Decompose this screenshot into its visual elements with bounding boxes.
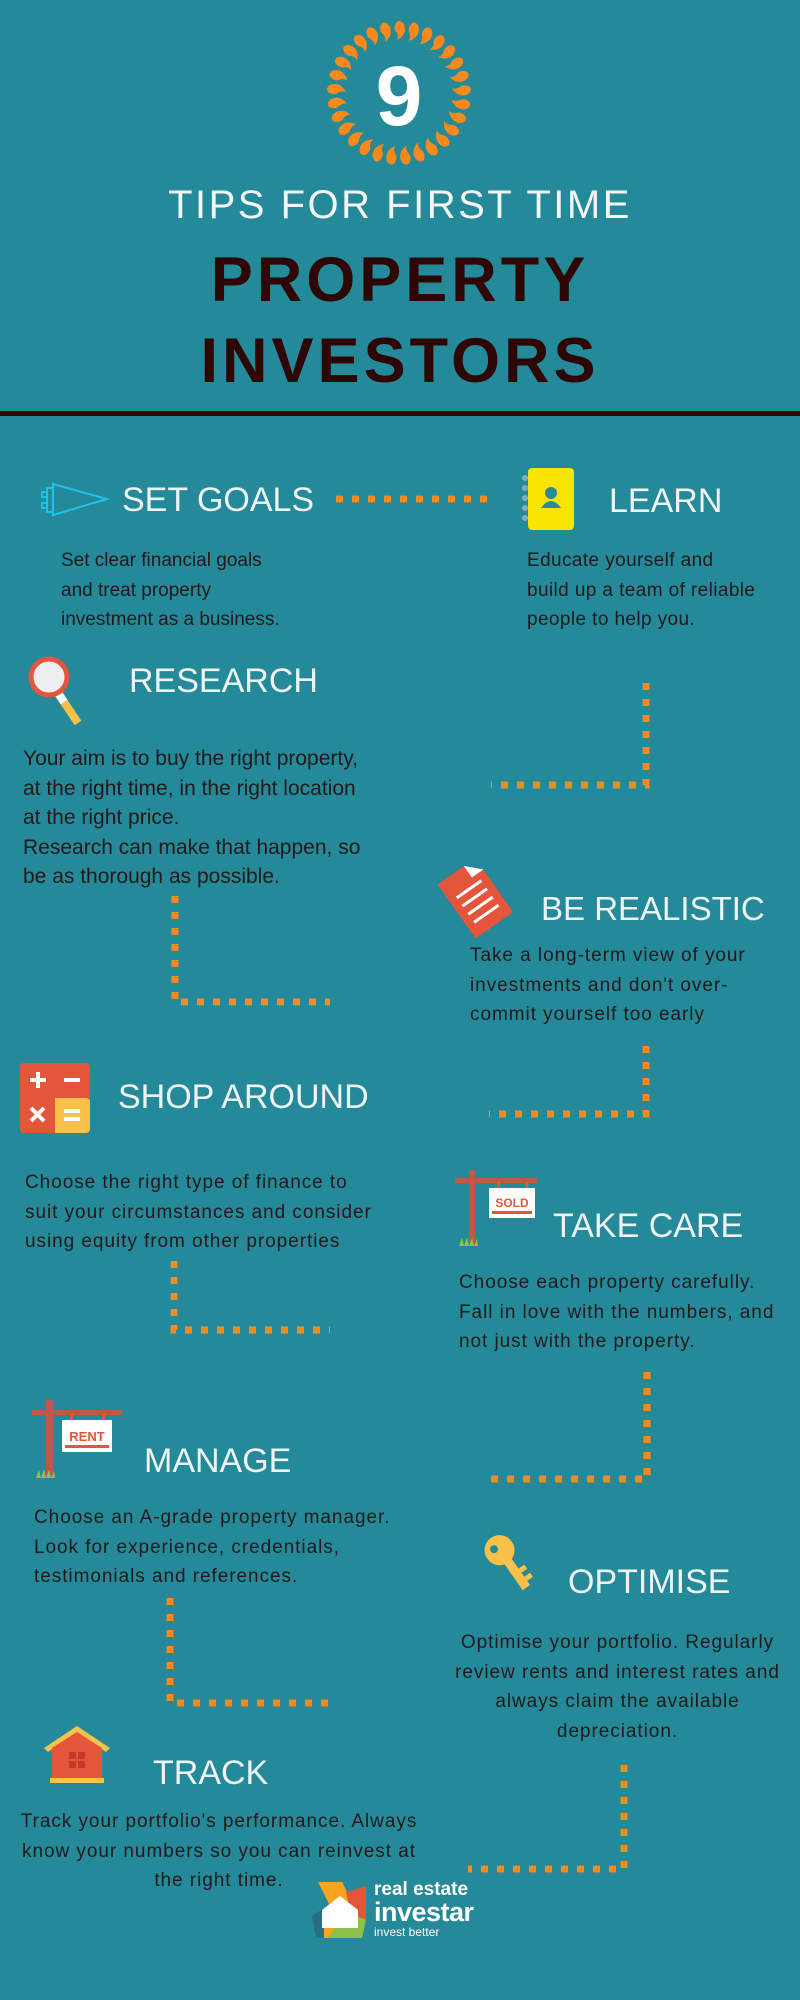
text: Choose the right type of finance to xyxy=(25,1172,348,1193)
text: Optimise your portfolio. Regularly xyxy=(461,1632,774,1653)
header badge: 9 in drop ring xyxy=(327,21,471,165)
icon: house xyxy=(44,1726,110,1783)
logo text: investar xyxy=(374,1897,474,1927)
text: not just with the property. xyxy=(459,1331,696,1352)
heading: TRACK xyxy=(153,1754,268,1792)
text: Choose an A-grade property manager. xyxy=(34,1507,390,1528)
text: Educate yourself and xyxy=(527,550,714,571)
text: people to help you. xyxy=(527,609,695,630)
text: be as thorough as possible. xyxy=(23,865,280,888)
text xyxy=(527,550,755,630)
logo text: invest better xyxy=(374,1925,439,1939)
text xyxy=(455,1632,780,1742)
text: Look for experience, credentials, xyxy=(34,1536,340,1558)
tip: set goals xyxy=(41,481,314,630)
text: Set clear financial goals xyxy=(61,550,262,571)
header badge: 9 in drop ring: 9 xyxy=(376,49,422,143)
text xyxy=(61,550,280,630)
text: the right time. xyxy=(154,1870,284,1891)
icon: sold sign xyxy=(455,1170,537,1246)
icon: magnifier xyxy=(28,656,82,726)
text xyxy=(34,1507,390,1587)
text xyxy=(459,1272,774,1352)
subtitle: TIPS FOR FIRST TIME xyxy=(168,183,632,227)
text: Track your portfolio's performance. Always xyxy=(21,1811,417,1832)
tip: optimise xyxy=(455,1535,780,1742)
tip: take care xyxy=(455,1170,774,1352)
text: build up a team of reliable xyxy=(527,580,755,600)
title: PROPERTY xyxy=(211,245,589,315)
text: review rents and interest rates and xyxy=(455,1662,780,1682)
text: Research can make that happen, so xyxy=(23,836,360,858)
tip: research xyxy=(23,656,360,888)
text xyxy=(25,1172,372,1252)
tip: track xyxy=(21,1726,417,1891)
text xyxy=(23,747,360,888)
text: Take a long-term view of your xyxy=(470,945,746,966)
text: commit yourself too early xyxy=(470,1004,705,1025)
divider line xyxy=(0,411,800,416)
logo text xyxy=(374,1879,474,1939)
text: using equity from other properties xyxy=(25,1231,340,1252)
text: Choose each property carefully. xyxy=(459,1272,755,1293)
logo text: real estate xyxy=(374,1879,468,1900)
heading: OPTIMISE xyxy=(568,1563,730,1601)
tip: manage xyxy=(32,1400,390,1587)
icon: calculator xyxy=(20,1063,90,1133)
heading: SHOP AROUND xyxy=(118,1078,369,1116)
heading: LEARN xyxy=(609,482,722,520)
text: investments and don't over- xyxy=(470,974,728,996)
icon: document xyxy=(438,866,514,938)
text: Your aim is to buy the right property, xyxy=(23,747,358,770)
text: always claim the available xyxy=(495,1691,740,1712)
heading: MANAGE xyxy=(144,1442,291,1480)
title line 2: INVESTORS xyxy=(201,326,599,396)
heading: BE REALISTIC xyxy=(541,890,765,927)
text: and treat property xyxy=(61,580,211,600)
text: Fall in love with the numbers, and xyxy=(459,1302,774,1322)
tip: be realistic xyxy=(438,866,765,1025)
icon: megaphone xyxy=(41,482,110,516)
text: testimonials and references. xyxy=(34,1566,298,1587)
icon: yellow notebook xyxy=(522,468,574,530)
text: suit your circumstances and consider xyxy=(25,1202,372,1222)
logo mark xyxy=(312,1882,366,1938)
text: at the right price. xyxy=(23,806,179,829)
text xyxy=(470,945,746,1025)
heading: TAKE CARE xyxy=(553,1207,743,1245)
icon: rent sign xyxy=(32,1400,122,1478)
text: at the right time, in the right location xyxy=(23,776,356,800)
icon: sold sign: SOLD xyxy=(495,1196,529,1210)
logo xyxy=(312,1879,474,1939)
text: investment as a business. xyxy=(61,609,280,630)
icon: rent sign: RENT xyxy=(69,1429,105,1444)
text: know your numbers so you can reinvest at xyxy=(22,1840,416,1862)
tip: learn xyxy=(522,468,755,630)
text xyxy=(21,1811,417,1891)
icon: key xyxy=(484,1535,533,1590)
tip: shop around xyxy=(20,1063,372,1252)
heading: RESEARCH xyxy=(129,662,318,700)
text: depreciation. xyxy=(557,1720,678,1742)
heading: SET GOALS xyxy=(122,481,314,519)
